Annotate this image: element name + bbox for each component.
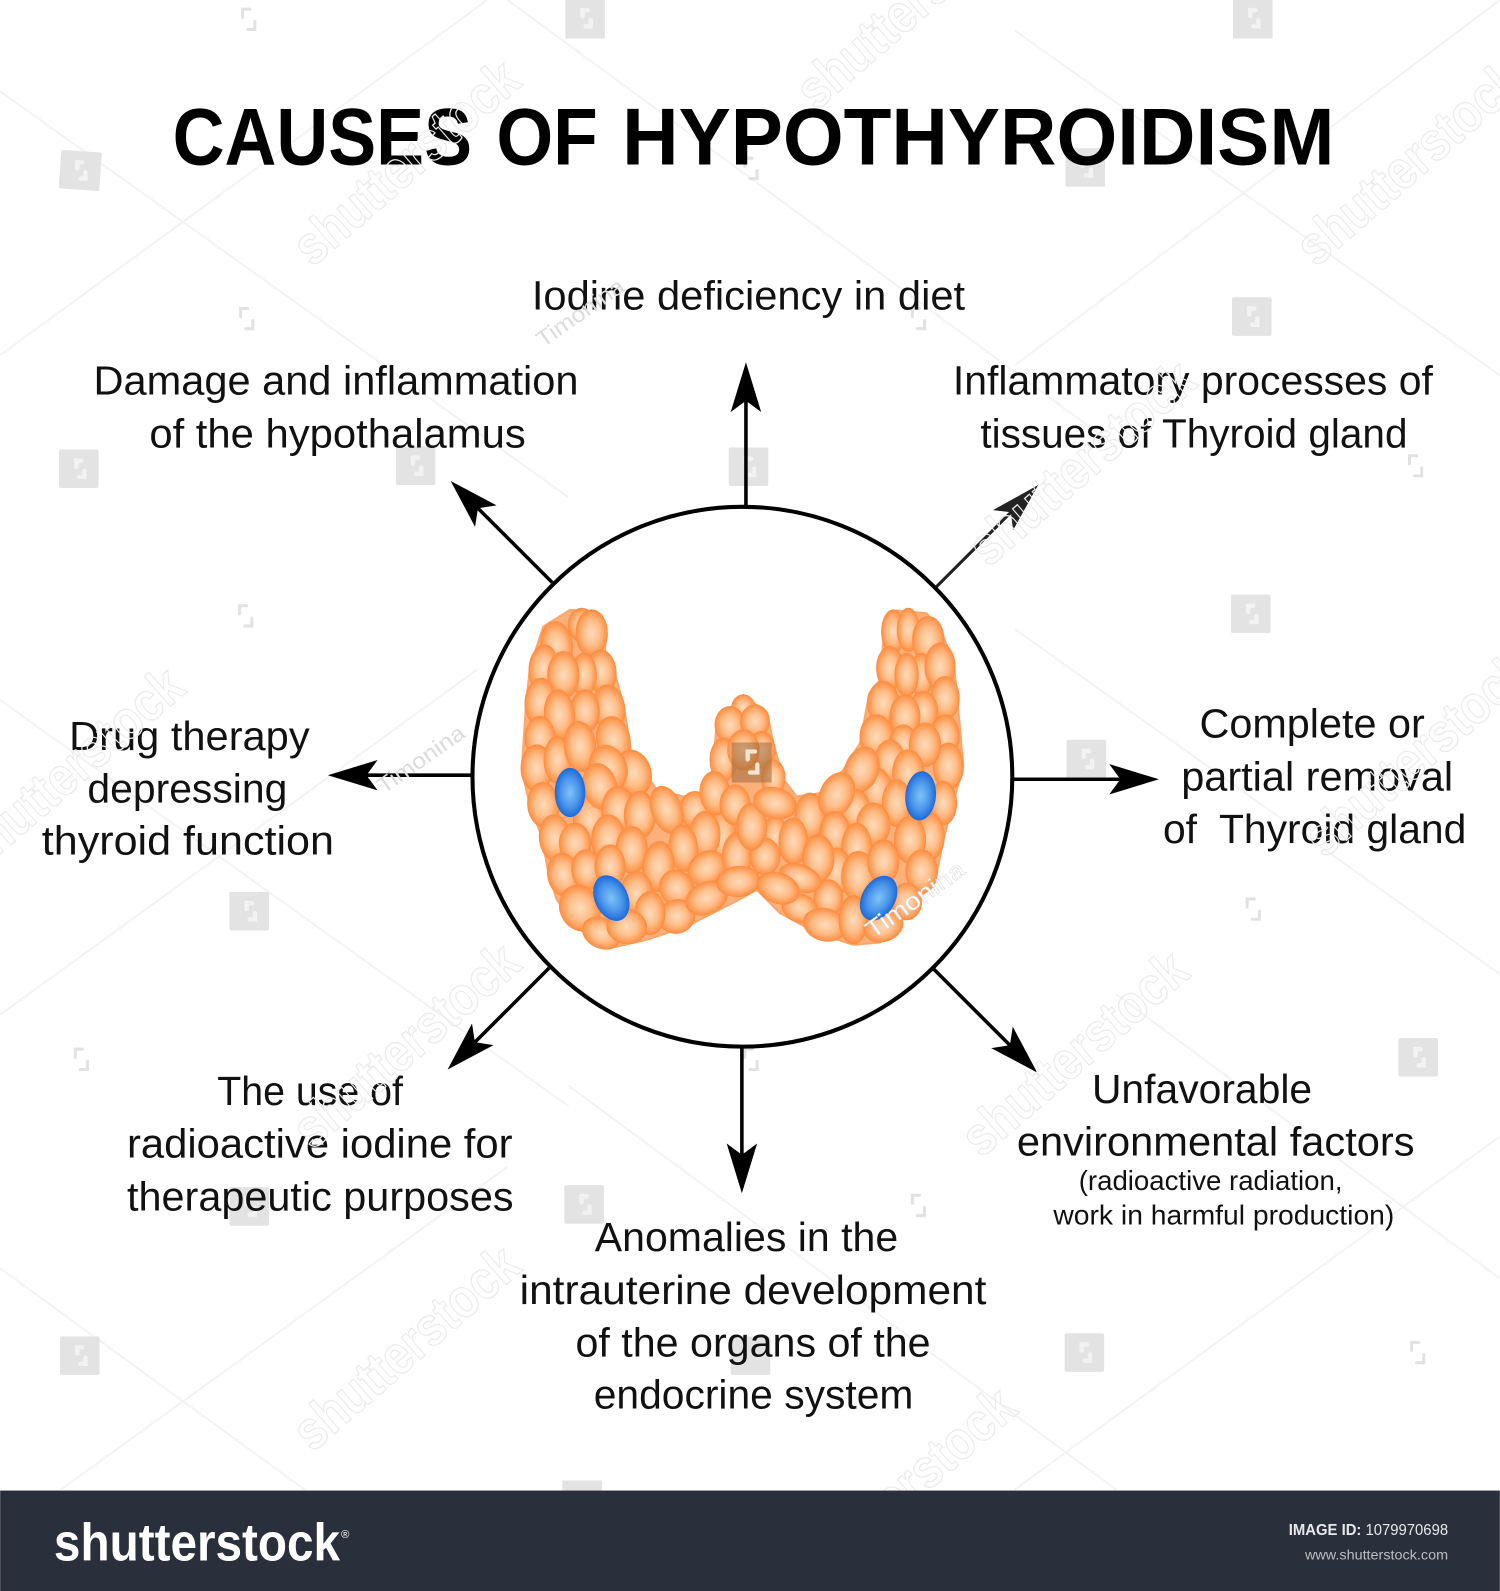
shutterstock watermarks: shutterstock [280,930,531,1160]
watermark credit on thyroid: Timonina [861,856,971,944]
text: drug therapy [42,713,334,863]
watermark credit text: Timonina [532,273,630,352]
text: environmental factors: environmental factors [1017,1119,1415,1165]
arrow: left [328,760,472,790]
footer image id: IMAGE ID: 1079970698 [1289,1522,1448,1539]
text: removal of thyroid [1163,701,1466,852]
text: intrauterine anomalies: intrauterine development [520,1267,986,1313]
text: drug therapy: depressing [87,766,287,812]
text: inflammatory processes: tissues of Thyroid gland [980,410,1408,456]
text: radioactive iodine: radioactive iodine for [127,1121,513,1167]
watermark credit text: Timonina [372,720,470,799]
shutterstock watermarks: shutterstock [949,938,1200,1168]
thyroid silhouette [522,610,963,948]
central circle [472,507,1012,1047]
arrow: right [1014,764,1159,794]
arrow: down [727,1048,757,1193]
text: removal of thyroid: of Thyroid gland [1163,806,1466,852]
text: removal of thyroid: partial removal [1181,753,1453,799]
arrow: upper right [936,475,1048,587]
text: environmental factors [1017,1066,1415,1231]
text: radioactive iodine [127,1068,514,1219]
small watermark swirls [75,9,1424,1363]
text: environmental factors: work in harmful production) [1052,1200,1394,1231]
text: hypothalamus damage [94,358,579,456]
footer bar [0,1491,1500,1591]
text: intrauterine anomalies: Anomalies in the [595,1214,898,1260]
title: CAUSES [173,92,472,182]
title: OF [496,92,598,182]
footer logo: shutterstock [54,1514,341,1573]
text: intrauterine anomalies: of the organs of the [575,1320,931,1366]
text: inflammatory processes: Inflammatory processes of [953,358,1434,404]
text: environmental factors: Unfavorable [1092,1066,1312,1112]
title [173,92,1334,182]
text: intrauterine anomalies: endocrine system [594,1371,913,1417]
text: radioactive iodine: therapeutic purposes [127,1173,514,1219]
text: environmental factors: (radioactive radiation, [1079,1165,1343,1196]
arrow: lower left [437,968,549,1080]
text: inflammatory processes [953,358,1434,456]
footer logo: ® [341,1529,350,1541]
text: hypothalamus damage: Damage and inflammation [94,358,579,404]
text: drug therapy: thyroid function [42,817,334,863]
arrow: up [731,362,761,505]
watermark square on thyroid [732,743,772,782]
text: intrauterine anomalies [520,1214,986,1417]
thyroid lobules [521,608,963,955]
title: HYPOTHYROIDISM [622,92,1334,182]
thyroid gland illustration [521,608,971,955]
arrow: upper left [440,470,552,582]
text: hypothalamus damage: of the hypothalamus [149,410,526,456]
text: radioactive iodine: The use of [217,1068,404,1114]
arrow: lower right [934,969,1048,1083]
blue nodules [555,768,938,927]
text: drug therapy: Drug therapy [69,713,310,759]
shutterstock watermarks: shutterstock [280,47,531,277]
shutterstock watermarks: shutterstock [956,347,1207,577]
watermark square swirls [76,10,1424,1364]
shutterstock watermarks: shutterstock [280,1232,531,1462]
footer url: www.shutterstock.com [1304,1548,1448,1564]
text: removal of thyroid: Complete or [1199,701,1425,747]
text: iodine deficiency: Iodine deficiency in diet [532,272,965,318]
